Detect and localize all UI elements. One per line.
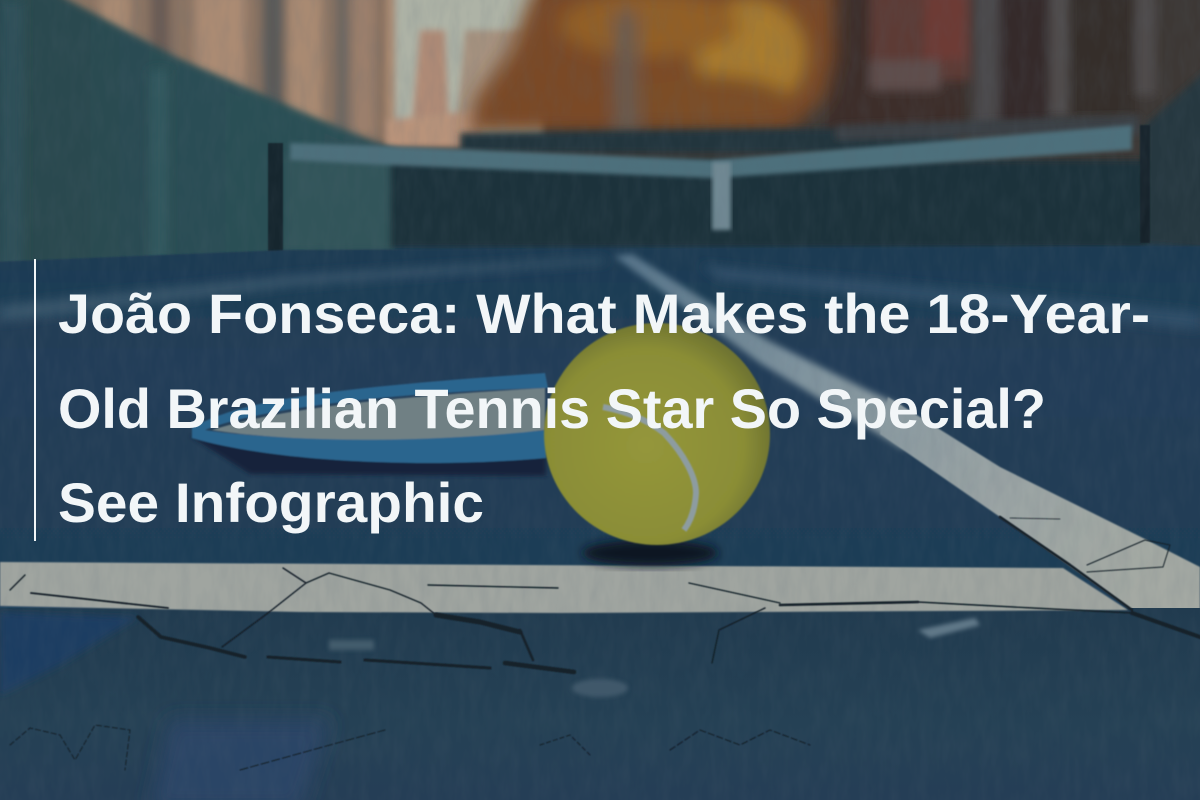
pale sky with bare trunks [383,0,543,148]
title: Old Brazilian Tennis Star So Special? [58,377,1046,440]
court scuff marks [329,618,980,697]
horizontal baseline [0,562,1128,613]
left green wall [0,0,395,278]
title: See Infographic [58,471,484,534]
court surface [0,246,1200,580]
tennis net [268,67,1200,263]
blue patch lower left [0,612,330,800]
title: João Fonseca: What Makes the 18-Year- [58,282,1150,345]
court cracks [10,517,1200,770]
title rule [34,259,36,541]
ball shadow [582,540,718,566]
diagonal court line [614,254,1200,612]
left wall stripes and base [0,0,168,270]
far background: buildings and fence [0,0,1200,170]
tennis racket [190,373,548,476]
autumn tree [470,0,835,135]
tennis ball [544,323,770,545]
title [58,282,1150,534]
lower court [0,608,1200,800]
far court side lines [0,258,1200,330]
